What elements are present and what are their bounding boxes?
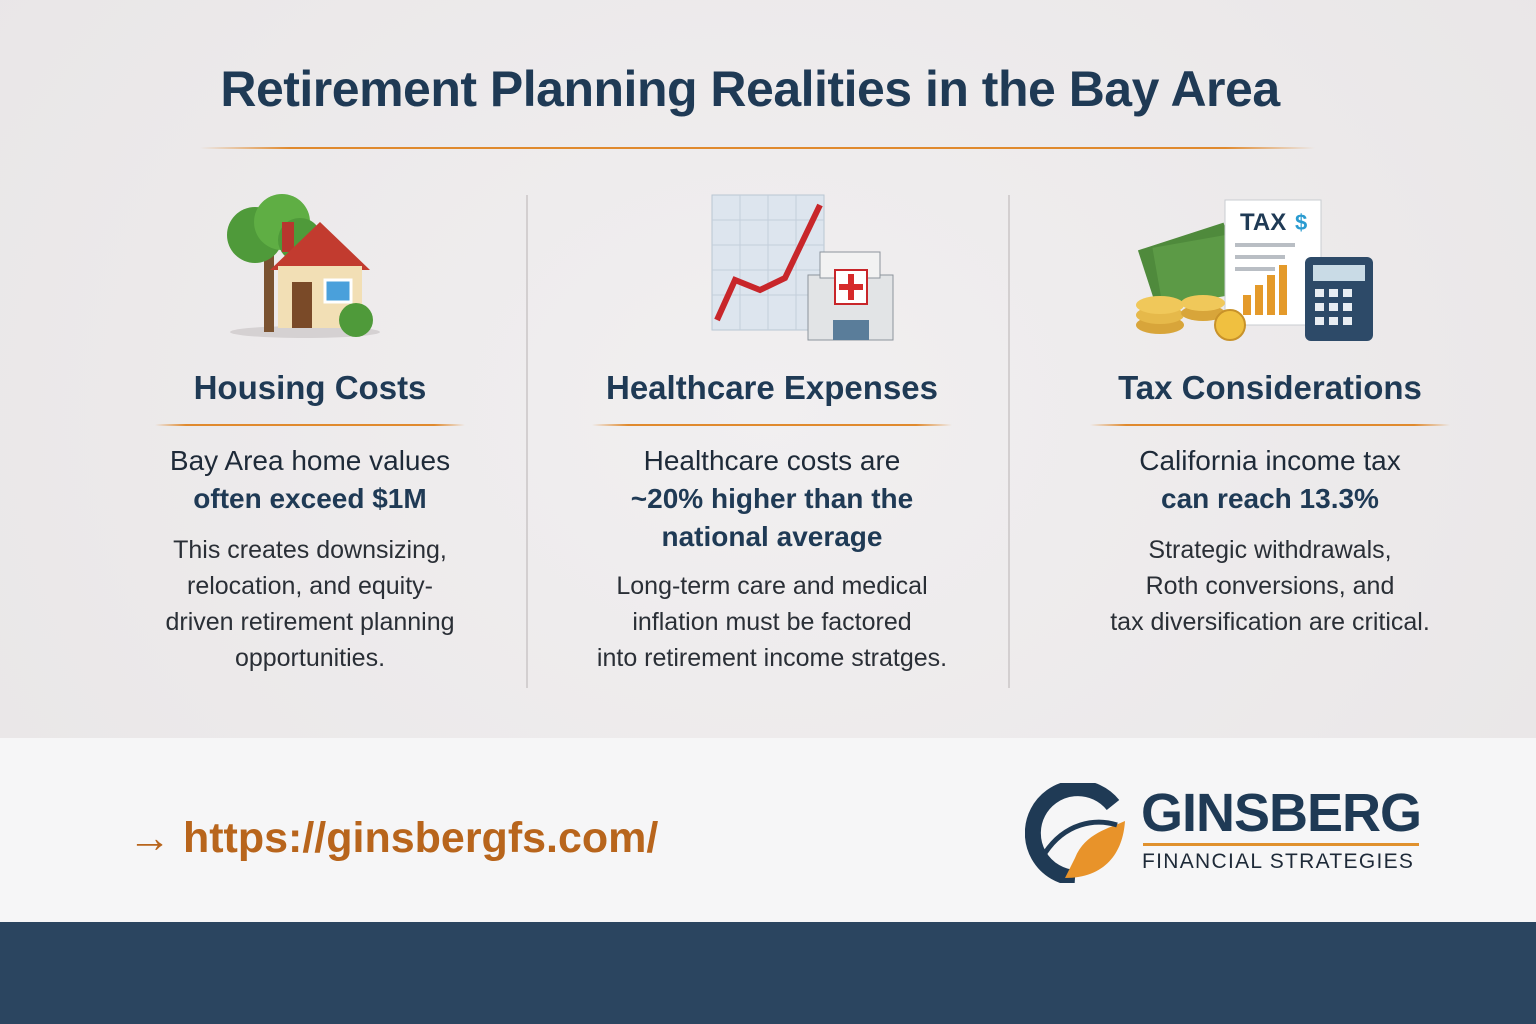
footer band xyxy=(0,738,1536,922)
text: tax body xyxy=(1110,536,1430,636)
text: healthcare highlight: national average xyxy=(662,521,882,552)
link: → https://ginsbergfs.com/ xyxy=(128,814,658,862)
text: tax highlight: California income tax xyxy=(1139,445,1401,476)
text: tax highlight: can reach 13.3% xyxy=(1161,483,1379,514)
logo xyxy=(1025,783,1421,883)
panel: housing xyxy=(156,369,464,672)
logo: FINANCIAL STRATEGIES xyxy=(1142,850,1414,873)
text: tax highlight xyxy=(1139,445,1401,514)
text: housing body xyxy=(165,536,455,672)
text: healthcare highlight: Healthcare costs are xyxy=(644,445,900,476)
text: housing body: driven retirement planning xyxy=(165,608,455,636)
panel: tax xyxy=(1092,369,1448,636)
text: healthcare body: Long-term care and medical xyxy=(616,572,928,600)
text: healthcare body xyxy=(597,572,947,672)
icon: tax money calculator: $ xyxy=(1295,210,1307,235)
icon: tax money calculator xyxy=(1136,200,1373,341)
text: housing body: relocation, and equity- xyxy=(187,572,433,600)
title: Retirement Planning Realities in the Bay Area xyxy=(220,61,1280,117)
text: healthcare body: into retirement income stratges. xyxy=(597,644,947,672)
logo: GINSBERG xyxy=(1141,783,1421,843)
heading: healthcare: Healthcare Expenses xyxy=(606,369,938,406)
text: tax body: tax diversification are critical. xyxy=(1110,608,1430,636)
icon: tax money calculator: TAX xyxy=(1240,209,1286,236)
text: tax body: Roth conversions, and xyxy=(1146,572,1394,600)
heading: housing: Housing Costs xyxy=(194,369,426,406)
text: tax body: Strategic withdrawals, xyxy=(1148,536,1392,564)
text: healthcare highlight xyxy=(631,445,913,552)
text: housing body: This creates downsizing, xyxy=(173,536,447,564)
text: housing body: opportunities. xyxy=(235,644,385,672)
icon: house with tree xyxy=(227,194,380,338)
heading: tax: Tax Considerations xyxy=(1118,369,1422,406)
text: housing highlight: Bay Area home values xyxy=(170,445,450,476)
text: healthcare body: inflation must be factored xyxy=(632,608,912,636)
text: healthcare highlight: ~20% higher than the xyxy=(631,483,913,514)
panel: healthcare xyxy=(594,369,950,672)
icon: chart and hospital xyxy=(712,194,894,340)
bottom bar xyxy=(0,922,1536,1024)
text: housing highlight xyxy=(170,445,450,514)
text: housing highlight: often exceed $1M xyxy=(193,483,427,514)
